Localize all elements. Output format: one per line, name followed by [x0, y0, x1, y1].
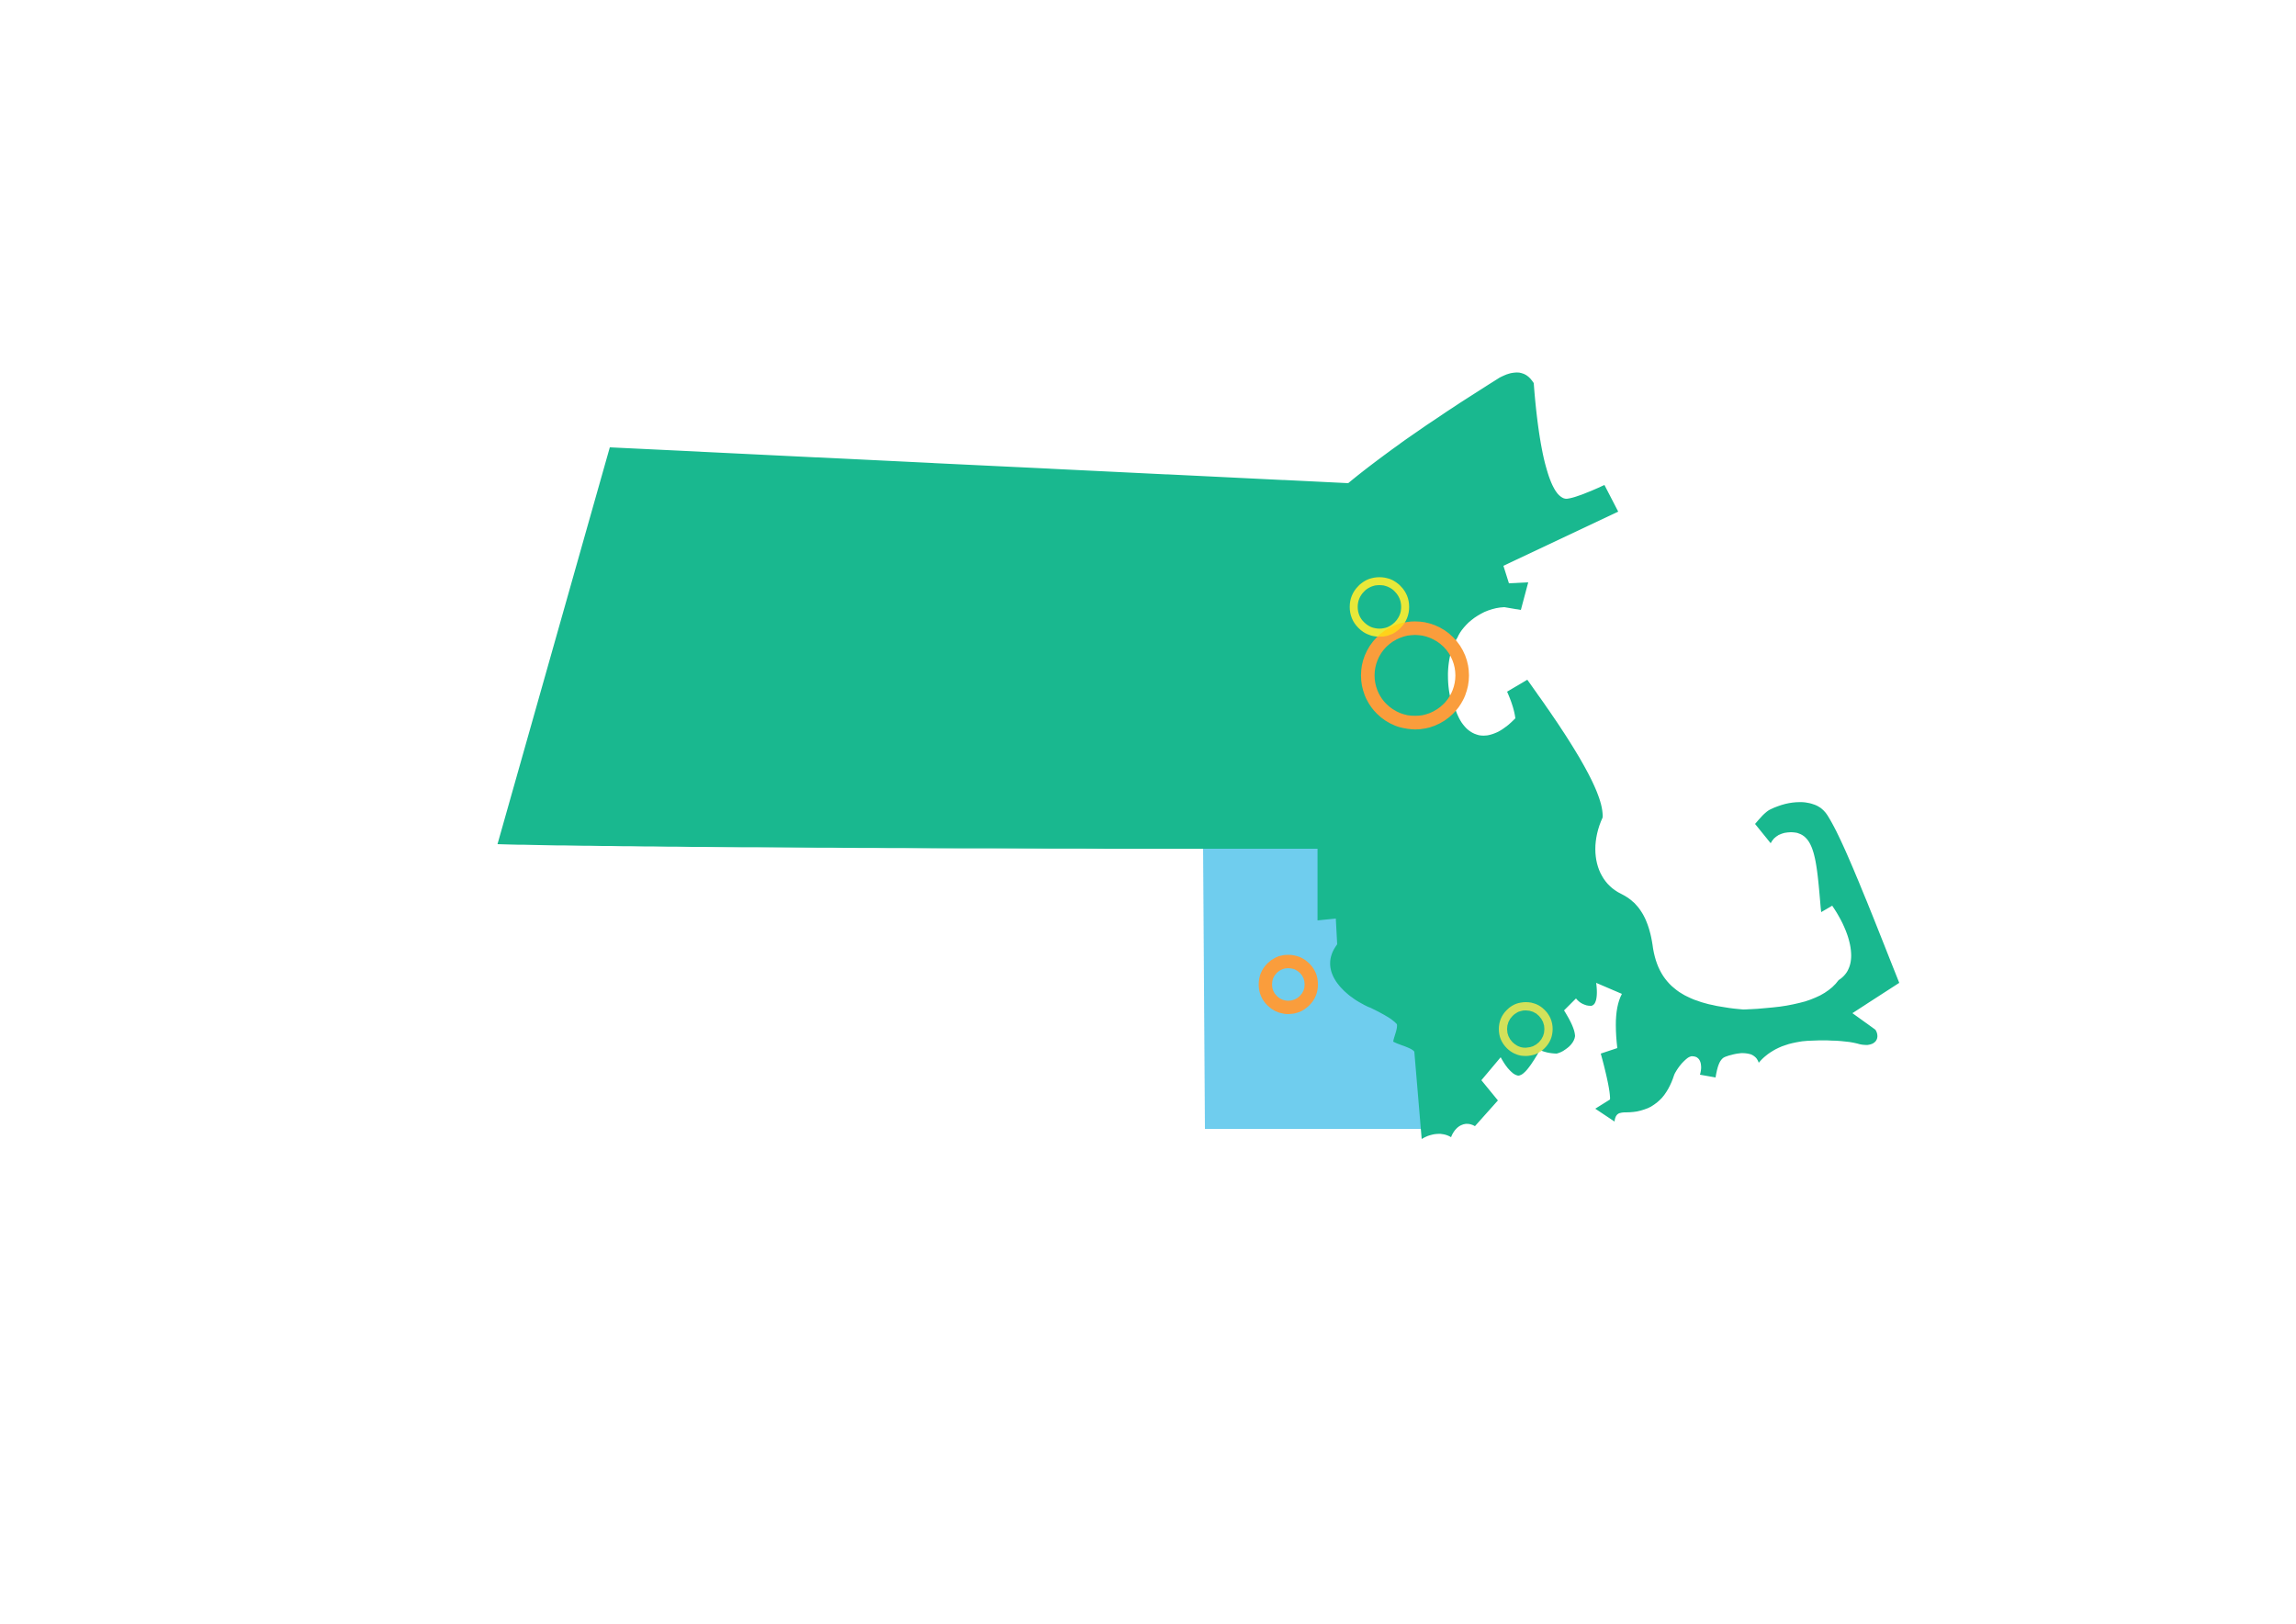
map of Massachusetts with markers — [498, 373, 1899, 1139]
marker: small orange ring — [1266, 962, 1311, 1008]
marker: yellow-green ring — [1503, 1007, 1548, 1052]
marker: yellow ring — [1354, 581, 1405, 633]
region: green state area — [498, 372, 1899, 1139]
region: blue highlighted county — [1203, 849, 1422, 1129]
marker: large orange ring — [1367, 628, 1462, 723]
